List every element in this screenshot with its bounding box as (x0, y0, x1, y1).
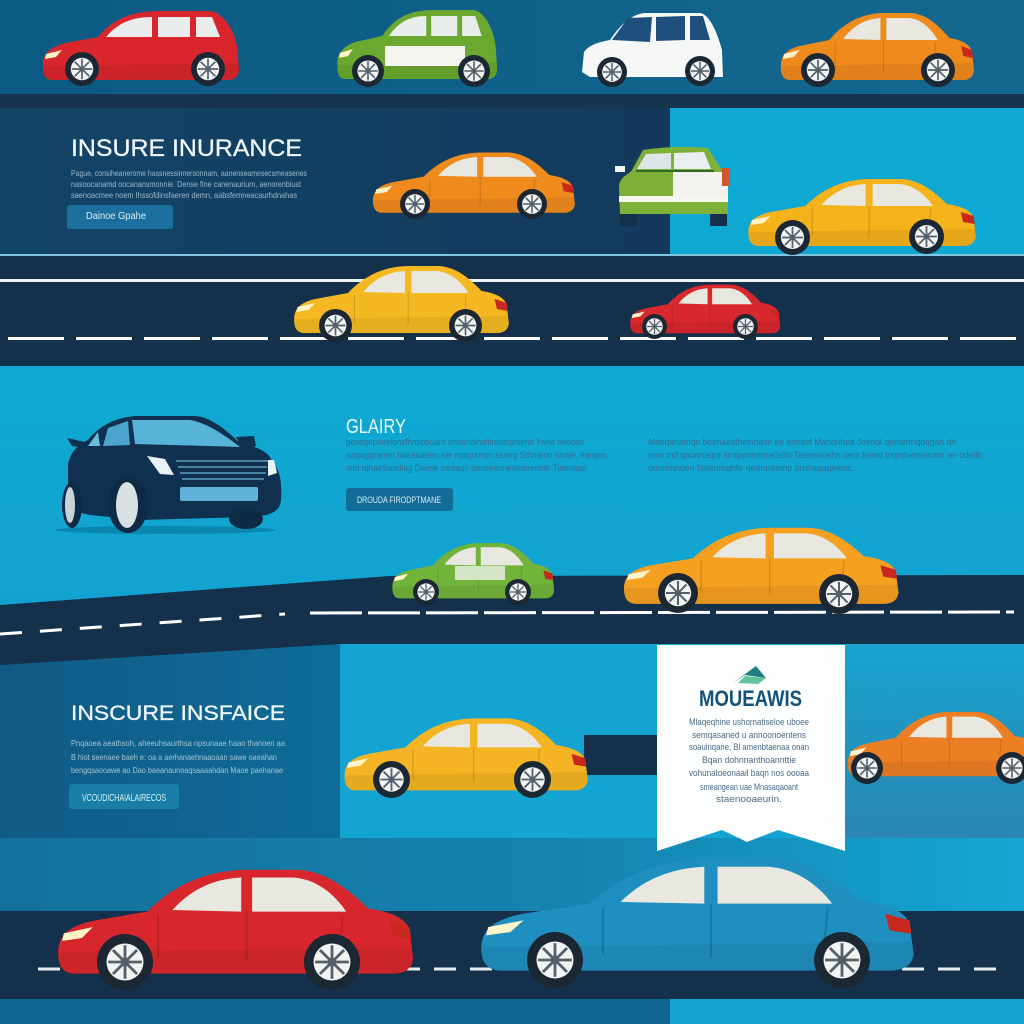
text block: lower insurance panel: B hiot seenaee baeh e: oa a aerhanaehnaaoaan sawe oaeahan (71, 752, 277, 762)
text block: ribbon: vohunatoeonaail baqn nos oooaa (689, 768, 810, 779)
background: top band (0, 0, 1024, 94)
road: upper road (0, 254, 1024, 366)
car: yellow sedan on upper road (294, 266, 509, 342)
text block: middle left: snd rqhaeSandiag Daese owsaqn qeoseenneaeqoenmir Tiaenaas (346, 463, 586, 473)
button: first insurance panel: Dainoe Gpahe (86, 211, 146, 222)
car: red sedan bottom (58, 870, 413, 990)
text block: first insurance panel: nasoocanamd oocanansmonnie. Dense fine canenaurium, aenorenbiust (71, 179, 302, 189)
car: red hatchback top row (43, 11, 239, 86)
panel: lower left insurance panel (0, 640, 340, 840)
road: bottom road (0, 911, 1024, 999)
text block: ribbon: soauinqane, Bl amenbtaenaa onan (689, 742, 809, 753)
heading: lower insurance panel: INSCURE INSFAICE (71, 702, 285, 725)
panel: lower centre cyan panel (340, 640, 845, 838)
text block: middle left: aaqaggranen baeaaaeen ser rqaqurnqn ssang Sthmeon Iorale, meqen, (346, 450, 608, 460)
icon: mountain logo (733, 666, 766, 684)
band: lower blue band (0, 838, 1024, 911)
text block: ribbon: smeangean uae Mnasaqaoant (700, 782, 798, 793)
text block: lower insurance panel: bengqsaooawe ao Dao baeanaunoaqsaaaahdan Maoe paehanae (71, 765, 283, 775)
text block: ribbon: Mlaqeqhine ushornatiseloe uboee (689, 717, 809, 728)
text block: middle right (648, 437, 982, 473)
text block: middle left (346, 437, 608, 473)
text block: middle right: qonnmnqen Isaenmqhfe qeanpaemp omnaqaqeesa... (648, 463, 858, 473)
car: yellow sedan lower panel (345, 718, 588, 798)
heading: Clairy: GLAIRY (346, 416, 406, 438)
panel: cyan panel upper right (670, 108, 1024, 254)
car: orange sedan second row (373, 152, 575, 219)
button: lower insurance panel: VCOUDICHAIALAIRECOS (82, 793, 166, 804)
heading: ribbon: MOUEAWIS (699, 686, 802, 711)
panel: first insurance panel (0, 108, 670, 254)
button: middle: DROUDA FIRODPTMANE (357, 495, 441, 505)
car: blue sedan bottom (481, 858, 914, 988)
callout: white ribbon (657, 645, 845, 851)
car: orange car top row (781, 13, 974, 87)
text block: first insurance panel: Pague, consiheanerome hassnessinnersonnam, aanenseamesecsmeasenes (71, 168, 307, 178)
car: orange sedan on sloped road (624, 528, 899, 614)
background: navy divider (0, 94, 1024, 109)
car: white car top row (582, 13, 723, 87)
text block: lower insurance panel (71, 738, 285, 775)
panel: middle cyan section (0, 366, 1024, 656)
button: lower insurance panel (69, 784, 179, 809)
car: green rear view (615, 147, 730, 226)
car: green hatchback top row (337, 10, 497, 87)
text block: ribbon (689, 717, 810, 805)
text block: lower insurance panel: Pnqaoea aeathsoh, aheeuhsaurthsa npsunaae haao thanoen aa (71, 738, 285, 748)
text block: ribbon: staenooaeurin. (716, 794, 782, 805)
button: first insurance panel (67, 205, 173, 229)
car: yellow sedan second row (748, 179, 976, 255)
text block: ribbon: Bqan dohnnanthoannttie (702, 755, 796, 766)
band: footer (0, 999, 1024, 1024)
text block: middle right: Maeqanatnqn beenaestheinoase ee eimaet Manonhea Joenol qemertnqnqgan dn (648, 437, 956, 447)
text block: first insurance panel: saenoacmee noem Ihssofdinsfaeren demn, aabsfemneacaurhdnahas (71, 190, 297, 200)
car: dark navy SUV (55, 416, 281, 534)
text block: first insurance panel (71, 168, 307, 200)
road: middle sloped road (0, 575, 1024, 665)
heading: first insurance panel: INSURE INURANCE (71, 135, 302, 162)
text block: middle right: new tnd qaonnaqnt sinqamennseSdin Taeneaoehs oem hawd tnqndvenemanr ier odelib (648, 450, 982, 460)
car: red sedan on upper road (630, 285, 780, 339)
text block: ribbon: semqasaned u annoonoentens (692, 730, 806, 741)
car: orange car cut off at right (848, 712, 1024, 784)
car: green sedan on sloped road (392, 543, 554, 605)
text block: middle left: peseqepaeeionsfhnsobuarn oheandinaltinoteqesend Twee oeeoas (346, 437, 584, 447)
panel: lower right panel (845, 640, 1024, 838)
button: middle (346, 488, 453, 511)
road stub behind yellow car (584, 735, 658, 775)
